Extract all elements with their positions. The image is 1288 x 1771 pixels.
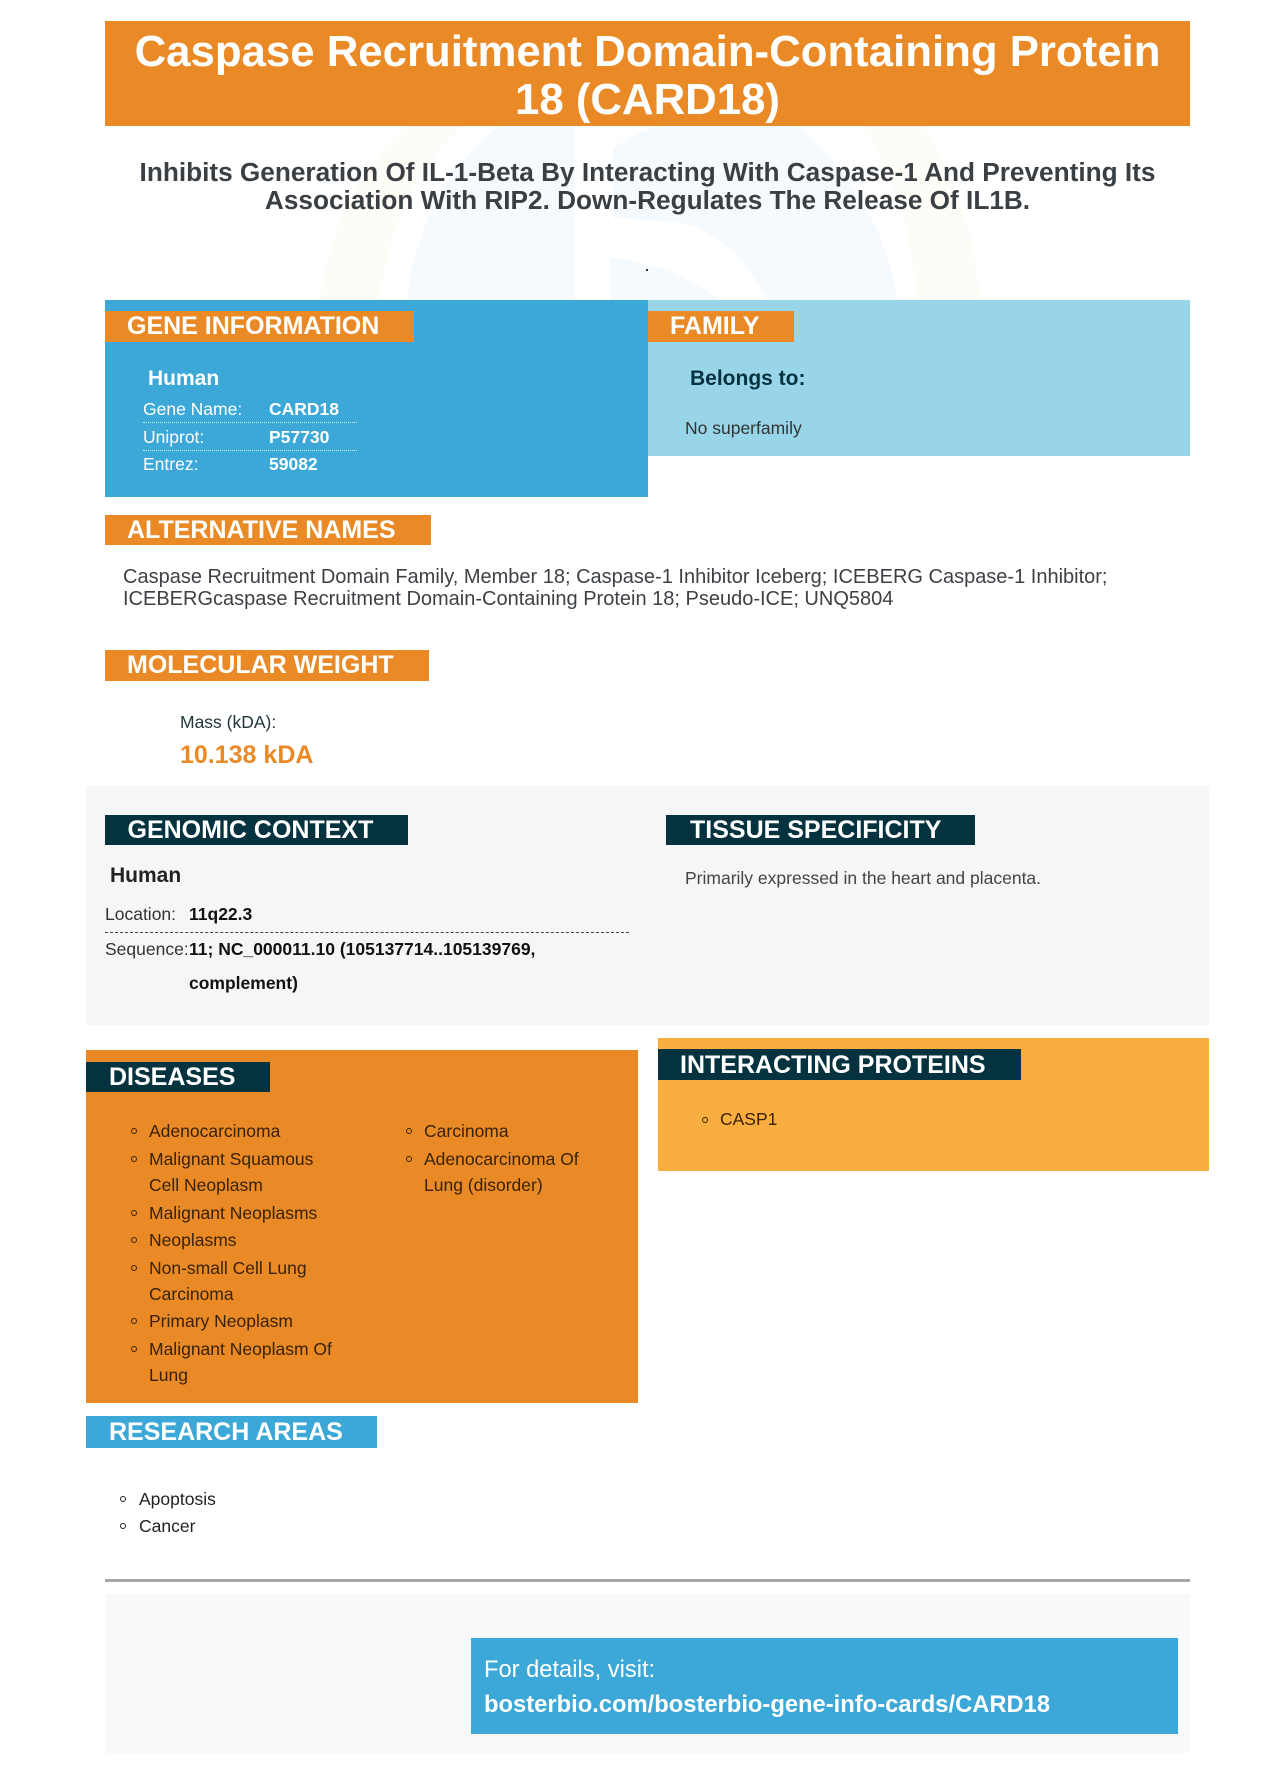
panel: gene information xyxy=(105,300,648,497)
heading: gene information: GENE INFORMATION xyxy=(127,312,379,340)
disease list column 1 xyxy=(131,1121,332,1385)
entrez row xyxy=(143,454,318,474)
title banner xyxy=(105,21,1190,126)
panel: interacting proteins xyxy=(658,1038,1209,1171)
alternative names text: Caspase Recruitment Domain Family, Member 18; Caspase-1 Inhibitor Iceberg; ICEBERG Caspase-1 Inhibitor; xyxy=(123,566,1107,588)
heading: diseases xyxy=(86,1062,270,1092)
alternative names text: ICEBERGcaspase Recruitment Domain-Containing Protein 18; Pseudo-ICE; UNQ5804 xyxy=(123,588,893,610)
subtitle: Association With RIP2. Down-Regulates The Release Of IL1B. xyxy=(265,185,1030,215)
callout: details link xyxy=(471,1638,1178,1734)
belongs to label: Belongs to: xyxy=(690,367,806,390)
disease list column 1: Cell Neoplasm xyxy=(149,1175,263,1195)
title banner: 18 (CARD18) xyxy=(515,75,780,124)
disease list column 1: Carcinoma xyxy=(149,1284,234,1304)
title banner: Caspase Recruitment Domain-Containing Protein xyxy=(135,27,1160,76)
sequence row: 11; NC_000011.10 (105137714..105139769, xyxy=(189,939,535,959)
disease list column 1: Non-small Cell Lung xyxy=(149,1258,307,1278)
location row: 11q22.3 xyxy=(189,904,252,924)
family value: No superfamily xyxy=(685,418,802,438)
sequence row: Sequence: xyxy=(105,939,189,959)
species label: Human xyxy=(110,864,181,887)
disease list column 1: Primary Neoplasm xyxy=(149,1311,293,1331)
mass label: Mass (kDA): xyxy=(180,712,276,732)
entrez row: Entrez: xyxy=(143,454,198,474)
small dot xyxy=(646,269,648,271)
disease list column 1: Malignant Squamous xyxy=(149,1149,313,1169)
background watermark logo xyxy=(407,126,897,300)
heading: interacting proteins: INTERACTING PROTEINS xyxy=(680,1051,986,1079)
panel: footer xyxy=(105,1594,1190,1753)
gene name row: Gene Name: xyxy=(143,399,242,419)
disease list column 1: Neoplasms xyxy=(149,1230,237,1250)
gene name row xyxy=(143,397,357,423)
panel: diseases xyxy=(86,1050,638,1403)
disease list column 2: Lung (disorder) xyxy=(424,1175,543,1195)
sequence row: complement) xyxy=(189,973,298,993)
disease list column 2: Adenocarcinoma Of xyxy=(424,1149,579,1169)
uniprot row xyxy=(143,425,357,451)
heading: genomic context: GENOMIC CONTEXT xyxy=(128,816,373,844)
gene name row: CARD18 xyxy=(269,399,339,419)
visit label: For details, visit: xyxy=(484,1657,655,1683)
heading: molecular weight: MOLECULAR WEIGHT xyxy=(127,651,394,679)
sequence row xyxy=(105,939,535,993)
mass value: 10.138 kDA xyxy=(180,741,313,769)
heading: family: FAMILY xyxy=(670,312,759,340)
research areas list xyxy=(120,1489,216,1536)
disease list column 2: Carcinoma xyxy=(424,1121,509,1141)
disease list column 2 xyxy=(406,1121,579,1195)
research areas list: Apoptosis xyxy=(139,1489,216,1509)
location row: Location: xyxy=(105,904,176,924)
divider rule xyxy=(105,1579,1190,1582)
uniprot row: Uniprot: xyxy=(143,427,204,447)
disease list column 1: Malignant Neoplasms xyxy=(149,1203,317,1223)
heading: tissue specificity: TISSUE SPECIFICITY xyxy=(690,816,941,844)
url: bosterbio.com/bosterbio-gene-info-cards/CARD18 xyxy=(484,1691,1050,1718)
heading: diseases: DISEASES xyxy=(109,1063,235,1091)
location row xyxy=(105,902,629,933)
research areas list: Cancer xyxy=(139,1516,195,1536)
alternative names text xyxy=(123,566,1107,610)
subtitle: Inhibits Generation Of IL-1-Beta By Interacting With Caspase-1 And Preventing Its xyxy=(140,157,1155,187)
subtitle xyxy=(140,157,1155,215)
entrez row: 59082 xyxy=(269,454,318,474)
tissue specificity text: Primarily expressed in the heart and placenta. xyxy=(685,868,1041,888)
disease list column 1: Lung xyxy=(149,1365,188,1385)
disease list column 1: Adenocarcinoma xyxy=(149,1121,280,1141)
panel: family xyxy=(648,300,1190,456)
heading: family xyxy=(648,311,794,342)
disease list column 1: Malignant Neoplasm Of xyxy=(149,1339,332,1359)
species label: Human xyxy=(148,367,219,390)
heading: research areas: RESEARCH AREAS xyxy=(109,1418,343,1446)
panel: grey context band xyxy=(86,786,1209,1025)
protein list: CASP1 xyxy=(720,1109,777,1129)
uniprot row: P57730 xyxy=(269,427,329,447)
heading: alternative names: ALTERNATIVE NAMES xyxy=(127,516,396,544)
